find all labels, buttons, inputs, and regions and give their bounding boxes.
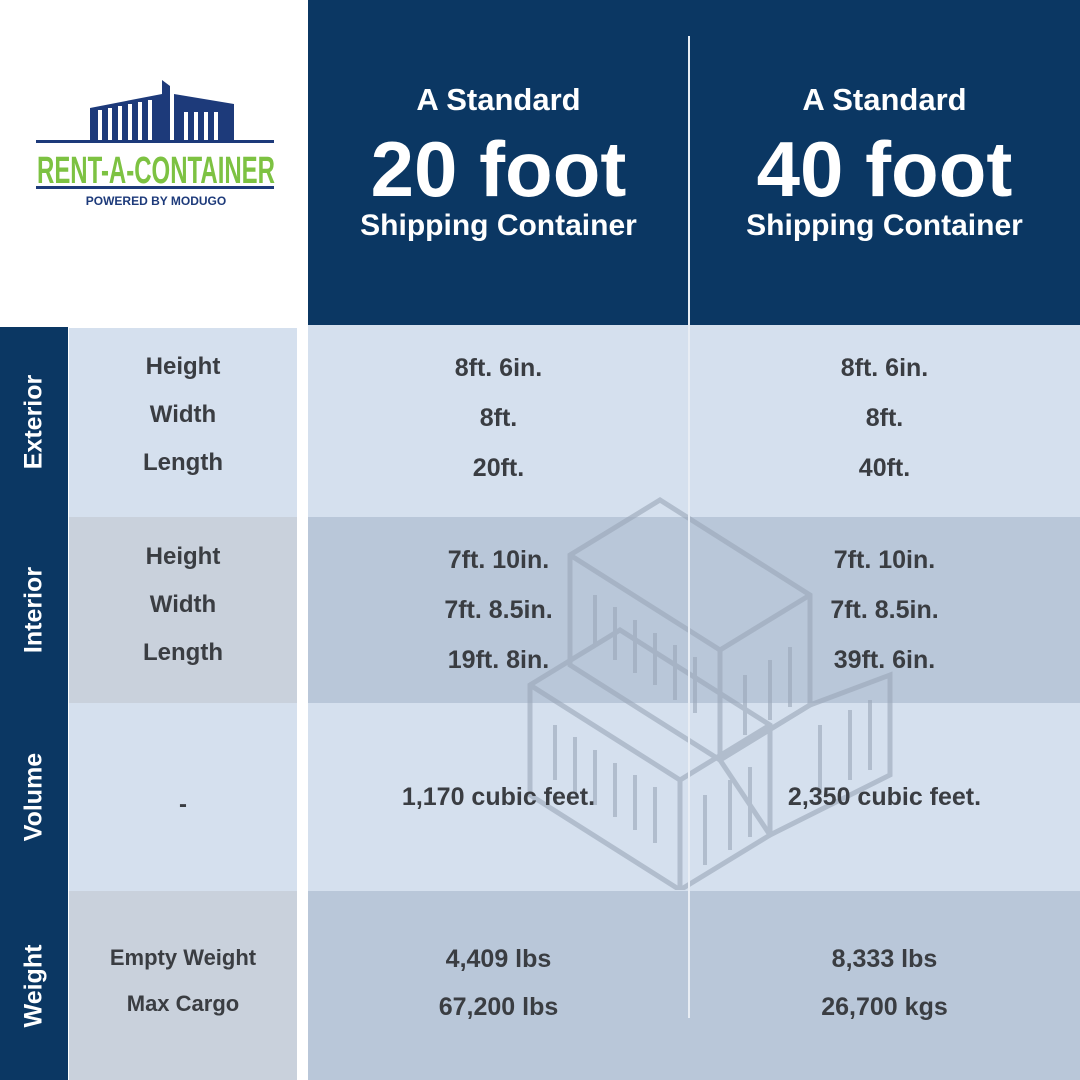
- labels: volume: -: [179, 791, 187, 818]
- data: exterior 20: 20ft.: [473, 454, 524, 482]
- data: weight 20: 4,409 lbs: [446, 945, 551, 973]
- header: 40 foot: 40 foot: [757, 125, 1012, 213]
- header: 20 foot: A Standard: [416, 82, 581, 117]
- data: interior 40: 39ft. 6in.: [834, 646, 935, 674]
- labels: interior: Width: [150, 590, 216, 618]
- labels: interior: [143, 542, 223, 666]
- logo: POWERED BY MODUGO: [86, 194, 226, 208]
- strip: Weight: [0, 891, 68, 1080]
- data: weight 40: [821, 945, 948, 1021]
- labels: interior: Height: [146, 542, 220, 570]
- strip: Volume: Volume: [20, 753, 48, 841]
- data: exterior 40: 8ft. 6in.: [841, 354, 928, 382]
- data: exterior 20: 8ft. 6in.: [455, 354, 542, 382]
- data: interior 40: [830, 546, 939, 674]
- header: 20 foot: [308, 0, 689, 325]
- data: interior 20: 7ft. 8.5in.: [444, 596, 553, 624]
- data: exterior 40: 40ft.: [859, 454, 910, 482]
- data: exterior 20: [455, 354, 542, 482]
- labels: weight: Empty Weight: [110, 945, 256, 970]
- data: exterior 20: 8ft.: [480, 404, 517, 432]
- column divider: [688, 36, 690, 1018]
- data: interior 40: 7ft. 8.5in.: [830, 596, 939, 624]
- labels: weight: Max Cargo: [127, 991, 239, 1016]
- labels: exterior: [143, 352, 223, 476]
- header: 40 foot: A Standard: [802, 82, 967, 117]
- data: weight 20: 67,200 lbs: [439, 993, 558, 1021]
- data: volume 40: 2,350 cubic feet.: [788, 783, 981, 811]
- data: interior 40: 7ft. 10in.: [834, 546, 935, 574]
- header: 40 foot: [689, 0, 1080, 325]
- strip: Interior: [0, 517, 68, 703]
- labels: exterior: Height: [146, 352, 220, 380]
- labels: weight: [110, 945, 256, 1016]
- data: interior 20: 7ft. 10in.: [448, 546, 549, 574]
- strip: Volume: [0, 703, 68, 891]
- data: weight 40: 8,333 lbs: [832, 945, 937, 973]
- icon: building: [36, 80, 274, 143]
- data: weight 20: [439, 945, 558, 1021]
- data: exterior 40: 8ft.: [866, 404, 903, 432]
- labels: exterior: Width: [150, 400, 216, 428]
- header: 40 foot: Shipping Container: [746, 209, 1023, 242]
- data: volume 20: 1,170 cubic feet.: [402, 783, 595, 811]
- logo: [36, 80, 275, 208]
- labels: exterior: Length: [143, 448, 223, 476]
- data: exterior 40: [841, 354, 928, 482]
- strip: Exterior: [0, 327, 68, 517]
- data: interior 20: 19ft. 8in.: [448, 646, 549, 674]
- strip: Weight: Weight: [20, 944, 48, 1027]
- data: weight 40: 26,700 kgs: [821, 993, 948, 1021]
- data: interior 20: [444, 546, 553, 674]
- header: 20 foot: 20 foot: [371, 125, 626, 213]
- strip: Exterior: Exterior: [20, 375, 48, 469]
- row backgrounds: [69, 328, 297, 517]
- watermark: containers: [528, 497, 892, 890]
- labels: interior: Length: [143, 638, 223, 666]
- header: 20 foot: Shipping Container: [360, 209, 637, 242]
- strip: Interior: Interior: [20, 567, 48, 653]
